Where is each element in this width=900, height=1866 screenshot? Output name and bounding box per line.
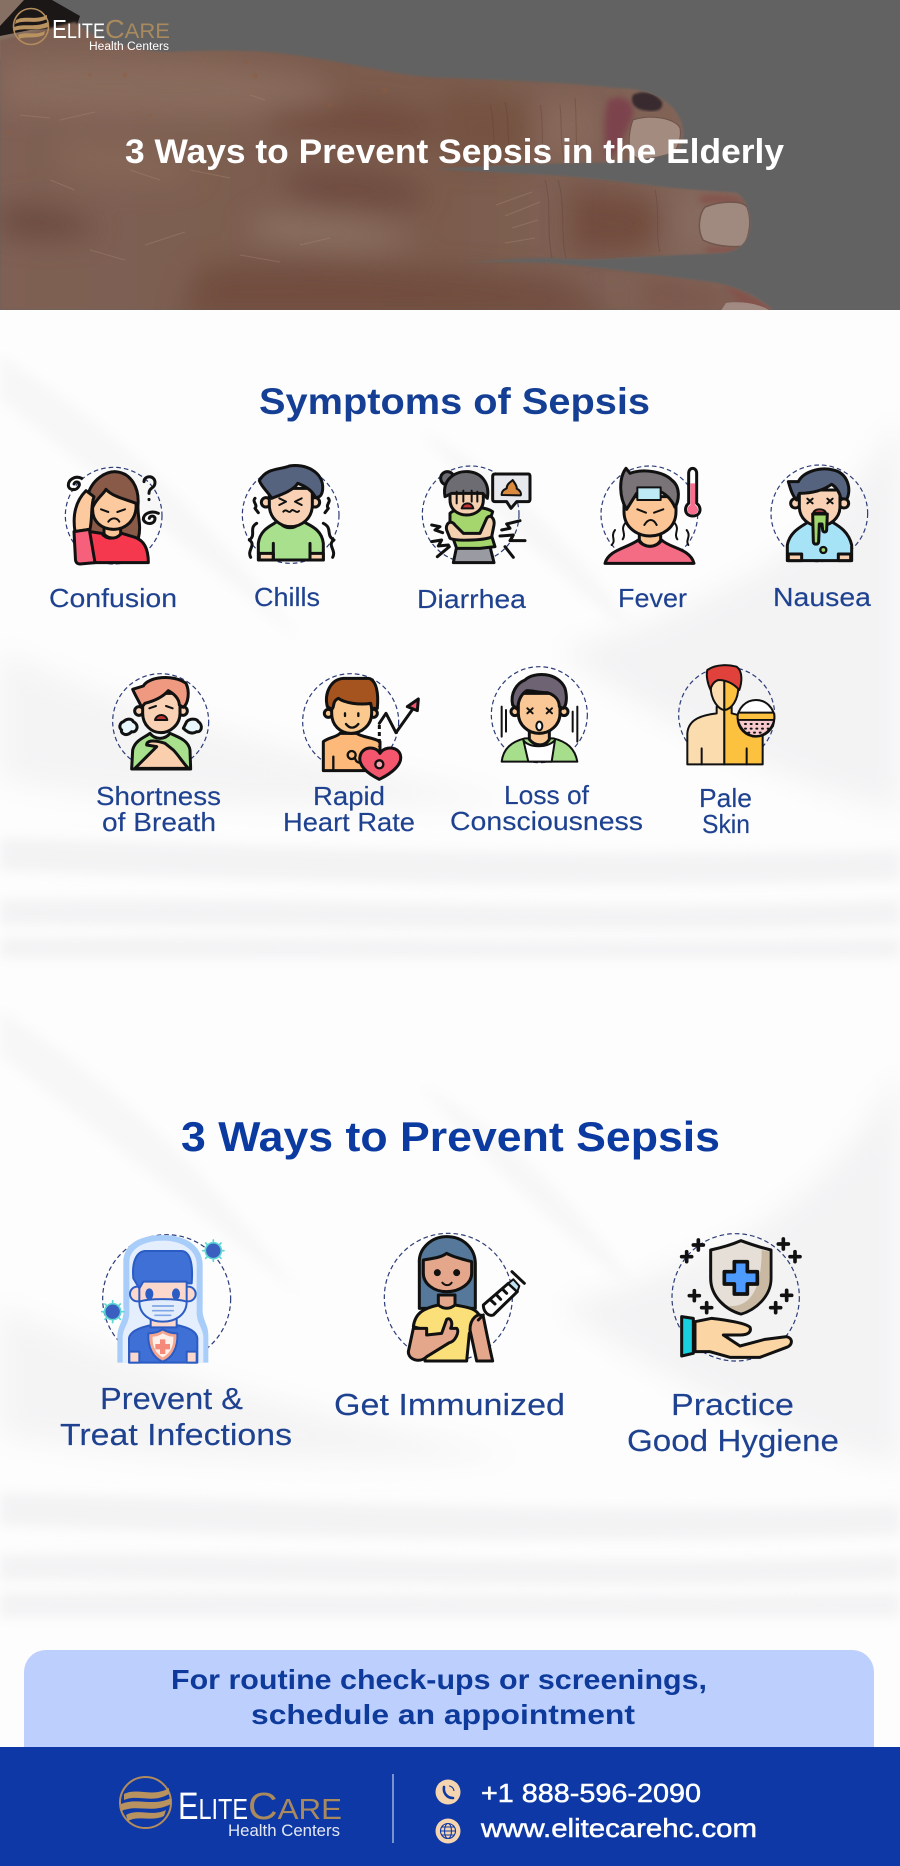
callout text: schedule an appointment: [251, 1699, 635, 1730]
icon: woman receiving a vaccine: [384, 1233, 524, 1361]
label: shortness of breath: [96, 781, 221, 837]
callout text: For routine check-ups or screenings,: [171, 1664, 707, 1695]
label: diarrhea: Diarrhea: [417, 584, 527, 614]
symptoms heading: Symptoms of Sepsis: [259, 381, 650, 422]
label: pale skin: Pale: [699, 783, 752, 813]
callout: appointment: [24, 1650, 874, 1780]
panel: 3 ways to prevent sepsis: [0, 1010, 900, 1617]
phone number: +1 888-596-2090: [481, 1778, 701, 1808]
symptom: loss of consciousness: [450, 667, 643, 836]
way 1: prevent and treat infections: [60, 1235, 292, 1452]
symptom: shortness of breath: [96, 674, 221, 837]
label: confusion: Confusion: [49, 583, 177, 613]
icon: hand with shield and sparkles: [672, 1234, 800, 1361]
header logo: [14, 8, 170, 53]
label: loss of consciousness: Loss of: [504, 780, 590, 810]
way 3: practice good hygiene: [627, 1234, 839, 1458]
label: nausea: Nausea: [773, 582, 872, 612]
prevention heading: 3 Ways to Prevent Sepsis: [181, 1113, 720, 1160]
symptom: fever: [601, 466, 700, 613]
label: chills: Chills: [254, 582, 320, 612]
footer logo: Health Centers: [228, 1821, 340, 1840]
icon: man fainting: [491, 667, 587, 763]
way 2: get immunized: [334, 1233, 565, 1422]
contact: website: [436, 1813, 757, 1844]
label: practice good hygiene: Practice: [671, 1387, 794, 1422]
label: prevent and treat infections: Prevent &: [100, 1381, 243, 1416]
contact: phone: [436, 1778, 701, 1808]
footer logo: [120, 1777, 342, 1840]
header logo: CARE: [105, 14, 170, 44]
symptom: confusion: [49, 467, 177, 613]
icon: globe: [436, 1818, 460, 1844]
label: prevent and treat infections: Treat Infections: [60, 1417, 292, 1452]
symptom: chills: [242, 466, 339, 612]
hand photo: [0, 0, 773, 320]
symptom: rapid heart rate: [283, 674, 418, 837]
label: rapid heart rate: Rapid: [313, 781, 385, 811]
panel: symptoms of sepsis: [0, 355, 900, 958]
website url: www.elitecarehc.com: [480, 1813, 757, 1843]
header banner: [0, 0, 900, 320]
label: shortness of breath: Shortness: [96, 781, 221, 811]
icon: man with thermometer: [601, 466, 700, 563]
label: rapid heart rate: Heart Rate: [283, 807, 415, 837]
icon: half-pale body with skin lens: [679, 665, 775, 764]
title: 3 Ways to Prevent Sepsis in the Elderly: [125, 133, 784, 171]
icon: man with racing heart: [303, 674, 418, 779]
symptom: nausea: [771, 465, 872, 612]
prevention background waves: [0, 1010, 900, 1617]
label: loss of consciousness: [450, 780, 643, 836]
label: practice good hygiene: Good Hygiene: [627, 1423, 839, 1458]
icon: shivering man: [242, 466, 339, 563]
icon: man struggling to breathe: [113, 674, 209, 770]
label: shortness of breath: of Breath: [102, 807, 216, 837]
label: pale skin: [699, 783, 752, 839]
icon: masked man with shield and viruses: [102, 1235, 231, 1363]
footer logo: ELITE: [178, 1786, 248, 1828]
symptom: diarrhea: [417, 466, 530, 614]
label: loss of consciousness: Consciousness: [450, 806, 643, 836]
header logo: ELITE: [52, 14, 105, 44]
icon: man vomiting: [771, 465, 868, 562]
header logo: Health Centers: [89, 41, 169, 53]
footer: [0, 1747, 900, 1866]
footer logo: CARE: [248, 1786, 342, 1828]
label: rapid heart rate: [283, 781, 415, 837]
icon: woman with stomach ache: [422, 466, 530, 563]
callout text: [171, 1664, 707, 1730]
label: prevent and treat infections: [60, 1381, 292, 1452]
label: pale skin: Skin: [702, 809, 750, 839]
icon: phone: [436, 1780, 460, 1804]
icon: woman holding head: [65, 467, 162, 564]
label: fever: Fever: [618, 583, 687, 613]
label: get immunized: Get Immunized: [334, 1387, 565, 1422]
label: practice good hygiene: [627, 1387, 839, 1458]
symptoms background waves: [0, 355, 900, 958]
symptom: pale skin: [679, 665, 775, 839]
